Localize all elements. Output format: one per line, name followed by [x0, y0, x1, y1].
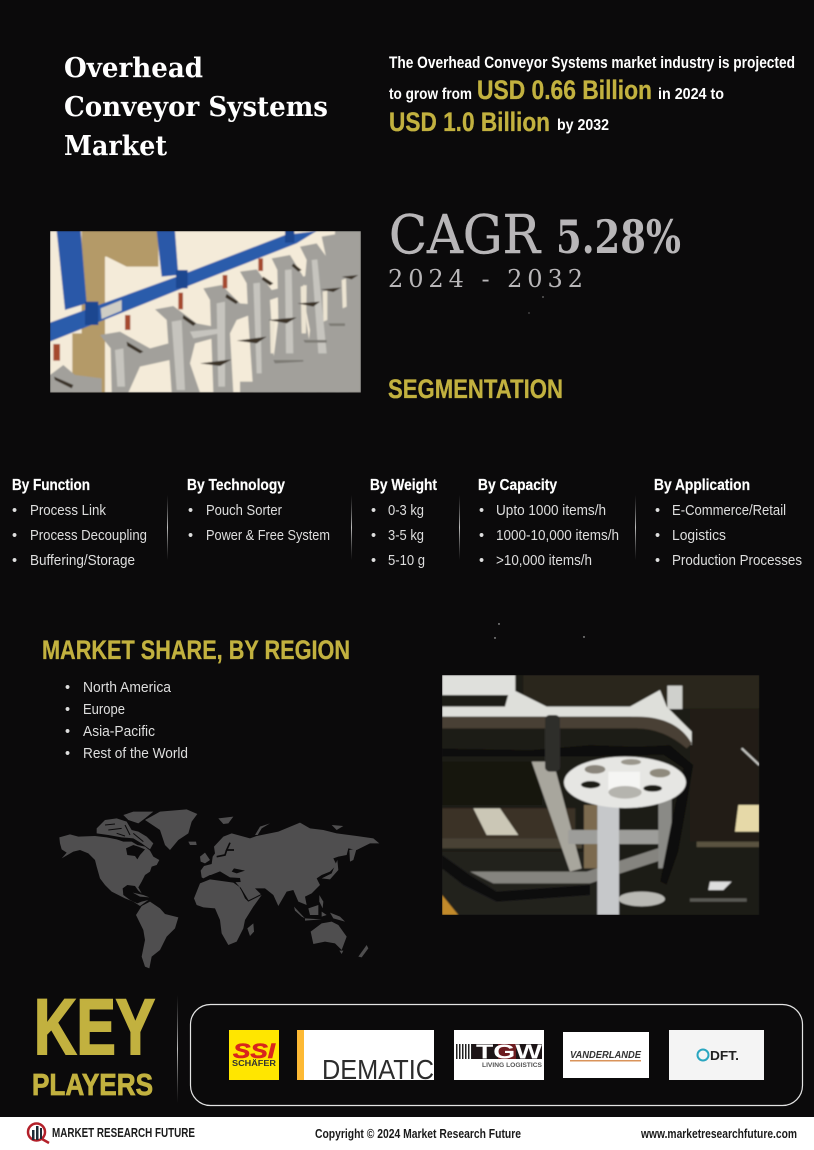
segment: by weight: 0-3 kg: [388, 503, 424, 519]
segment: by application: Production Processes: [672, 553, 802, 569]
segment: by application: •: [655, 503, 660, 519]
logo: TGW: LIVING LOGISTICS: [482, 1063, 542, 1069]
segment: by technology: Power & Free System: [206, 528, 330, 544]
segment: by application: E-Commerce/Retail: [672, 503, 786, 519]
segment: by capacity: Upto 1000 items/h: [496, 503, 606, 519]
logo: SSI Schaefer: [229, 1030, 279, 1080]
region list: North America: [83, 680, 172, 696]
world map: [59, 809, 379, 968]
segment: by technology: [187, 477, 330, 544]
photo: overhead conveyor with hanging parts: [50, 231, 361, 393]
region list: •: [65, 702, 70, 718]
market projection text: USD 1.0 Billion: [389, 107, 550, 137]
logo: DFT: [669, 1030, 764, 1080]
segment: by capacity: >10,000 items/h: [496, 553, 592, 569]
title: Market: [64, 131, 167, 162]
segment: by application: •: [655, 528, 660, 544]
segment: by weight: By Weight: [370, 477, 438, 494]
CAGR: 2024 - 2032: [388, 265, 583, 293]
segment: by technology: By Technology: [187, 477, 285, 494]
title: Conveyor Systems: [64, 92, 328, 123]
heading: market share by region: MARKET SHARE, BY REGION: [42, 635, 350, 665]
segment: by application: [654, 477, 802, 569]
segment: by weight: [370, 477, 438, 569]
segment: by weight: 3-5 kg: [388, 528, 424, 544]
segment: by technology: •: [188, 503, 193, 519]
segment: by function: [12, 477, 147, 569]
CAGR: [388, 205, 681, 293]
segment: by technology: Pouch Sorter: [206, 503, 282, 519]
segment: by weight: •: [371, 553, 376, 569]
logo: market research future: [28, 1124, 195, 1143]
region list: Rest of the World: [83, 746, 188, 762]
logo: Dematic: [297, 1030, 434, 1085]
segment: by function: •: [12, 553, 17, 569]
CAGR: CAGR: [389, 205, 542, 266]
title: Overhead: [64, 53, 203, 84]
market projection text: in 2024 to: [658, 86, 724, 103]
region list: •: [65, 680, 70, 696]
segment: by application: Logistics: [672, 528, 726, 544]
region list: Asia-Pacific: [83, 724, 155, 740]
segment: by application: •: [655, 553, 660, 569]
segment: by capacity: •: [479, 528, 484, 544]
segment: by weight: 5-10 g: [388, 553, 425, 569]
key players label: [32, 983, 155, 1102]
segment: by capacity: By Capacity: [478, 477, 557, 494]
logo: TGW: [454, 1030, 544, 1080]
heading: segmentation: SEGMENTATION: [388, 374, 563, 404]
footer: Copyright © 2024 Market Research Future: [315, 1127, 521, 1141]
logo: Vanderlande: VANDERLANDE: [570, 1049, 642, 1061]
segment: by function: Process Decoupling: [30, 528, 147, 544]
footer: [0, 1117, 814, 1150]
segment: by capacity: •: [479, 553, 484, 569]
key players label: KEY: [34, 983, 155, 1071]
key players panel: [190, 1004, 802, 1106]
key players label: PLAYERS: [32, 1067, 153, 1102]
logo: Dematic: DEMATIC: [322, 1054, 434, 1085]
segment: by function: Buffering/Storage: [30, 553, 135, 569]
logo: TGW: TGW: [476, 1042, 542, 1064]
market projection text: to grow from: [389, 86, 472, 103]
logo: DFT: DFT.: [710, 1048, 739, 1063]
market projection text: USD 0.66 Billion: [477, 75, 652, 105]
title: [64, 53, 328, 162]
segment: by application: By Application: [654, 477, 750, 494]
region list: •: [65, 724, 70, 740]
logo: SSI Schaefer: SCHÄFER: [232, 1059, 276, 1068]
segment: by technology: •: [188, 528, 193, 544]
region list: Europe: [83, 702, 125, 718]
photo: conveyor sprocket wheel: [442, 675, 759, 915]
market projection text: by 2032: [557, 117, 609, 134]
region list: •: [65, 746, 70, 762]
segment: by function: •: [12, 528, 17, 544]
segment: by function: By Function: [12, 477, 90, 494]
market projection text: [389, 54, 795, 137]
logo: Vanderlande: [563, 1032, 649, 1078]
segment: by capacity: •: [479, 503, 484, 519]
segment: by function: •: [12, 503, 17, 519]
segment: by capacity: 1000-10,000 items/h: [496, 528, 619, 544]
region list: [65, 680, 188, 762]
logo: SSI Schaefer: SSI: [233, 1040, 276, 1063]
CAGR: 5.28%: [556, 210, 681, 264]
logo: market research future: MARKET RESEARCH FUTURE: [52, 1126, 195, 1140]
segment: by function: Process Link: [30, 503, 107, 519]
segment: by capacity: [478, 477, 619, 569]
segment: by weight: •: [371, 503, 376, 519]
segment: by weight: •: [371, 528, 376, 544]
